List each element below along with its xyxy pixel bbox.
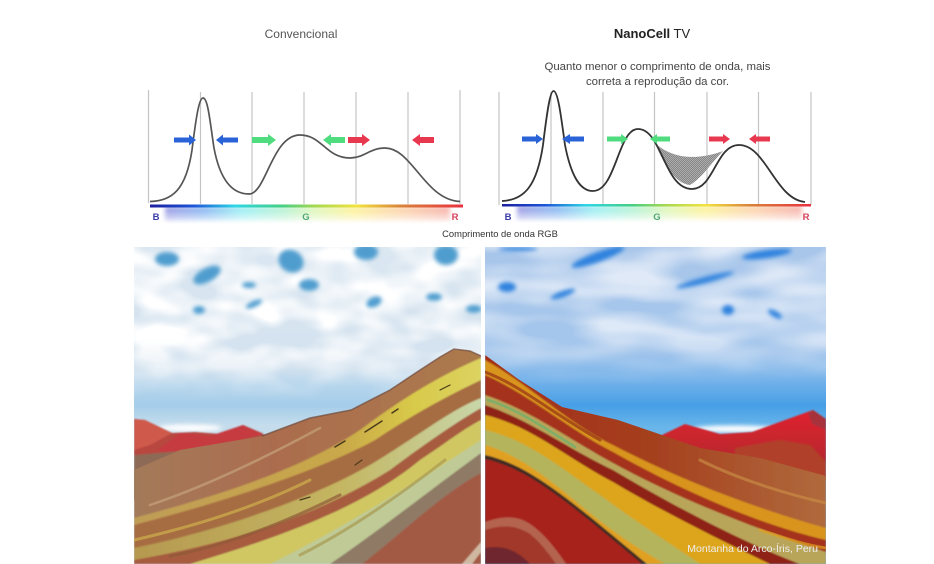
spectrum curve xyxy=(150,98,460,202)
arrow: green right xyxy=(252,134,276,146)
description text: correta a reprodução da cor. xyxy=(586,76,729,88)
distant red peaks xyxy=(134,418,265,500)
photo: conventional rainbow mountain xyxy=(134,244,482,564)
stripe details xyxy=(485,372,826,548)
arrow: green left xyxy=(323,134,345,146)
spectrum bar xyxy=(502,204,811,206)
spectrum glow xyxy=(517,206,802,221)
infographic xyxy=(134,28,826,564)
heading: Convencional: Convencional xyxy=(265,27,337,41)
sky xyxy=(134,244,482,564)
sky xyxy=(485,243,826,564)
arrow: green right xyxy=(607,134,628,144)
mountain ridge shadow xyxy=(262,349,481,436)
mountain stripes xyxy=(134,349,481,564)
photo: NanoCell rainbow mountain xyxy=(485,243,826,564)
distant red peaks xyxy=(662,410,826,480)
description text: Quanto menor o comprimento de onda, mais xyxy=(544,61,771,73)
label G: G xyxy=(653,212,661,223)
label G: G xyxy=(302,212,310,223)
arrow: blue left xyxy=(216,134,238,146)
arrow: red left xyxy=(412,134,434,146)
chart: conventional spectrum xyxy=(148,90,463,223)
spectrum bar xyxy=(150,204,463,208)
label R: R xyxy=(803,212,810,223)
label B: B xyxy=(153,212,160,223)
chart: NanoCell spectrum xyxy=(499,91,811,223)
arrow: blue right xyxy=(174,134,196,146)
arrow: red right xyxy=(709,134,730,144)
heading: NanoCell TV: NanoCell TV xyxy=(614,26,690,41)
arrow: blue left xyxy=(562,134,584,144)
arrow: red right xyxy=(348,134,370,146)
spectrum curve xyxy=(502,91,805,202)
arrow: red left xyxy=(749,134,770,144)
caption: photo location: Montanha do Arco-Íris, Peru xyxy=(687,542,818,555)
arrow: green left xyxy=(650,134,670,144)
hatched area xyxy=(655,143,723,185)
mountain stripes xyxy=(485,355,826,564)
label B: B xyxy=(505,212,512,223)
stripe details xyxy=(134,385,450,556)
label R: R xyxy=(452,212,459,223)
spectrum glow xyxy=(165,207,450,222)
arrow: blue right xyxy=(522,134,543,144)
axis caption: Comprimento de onda RGB xyxy=(442,228,558,239)
